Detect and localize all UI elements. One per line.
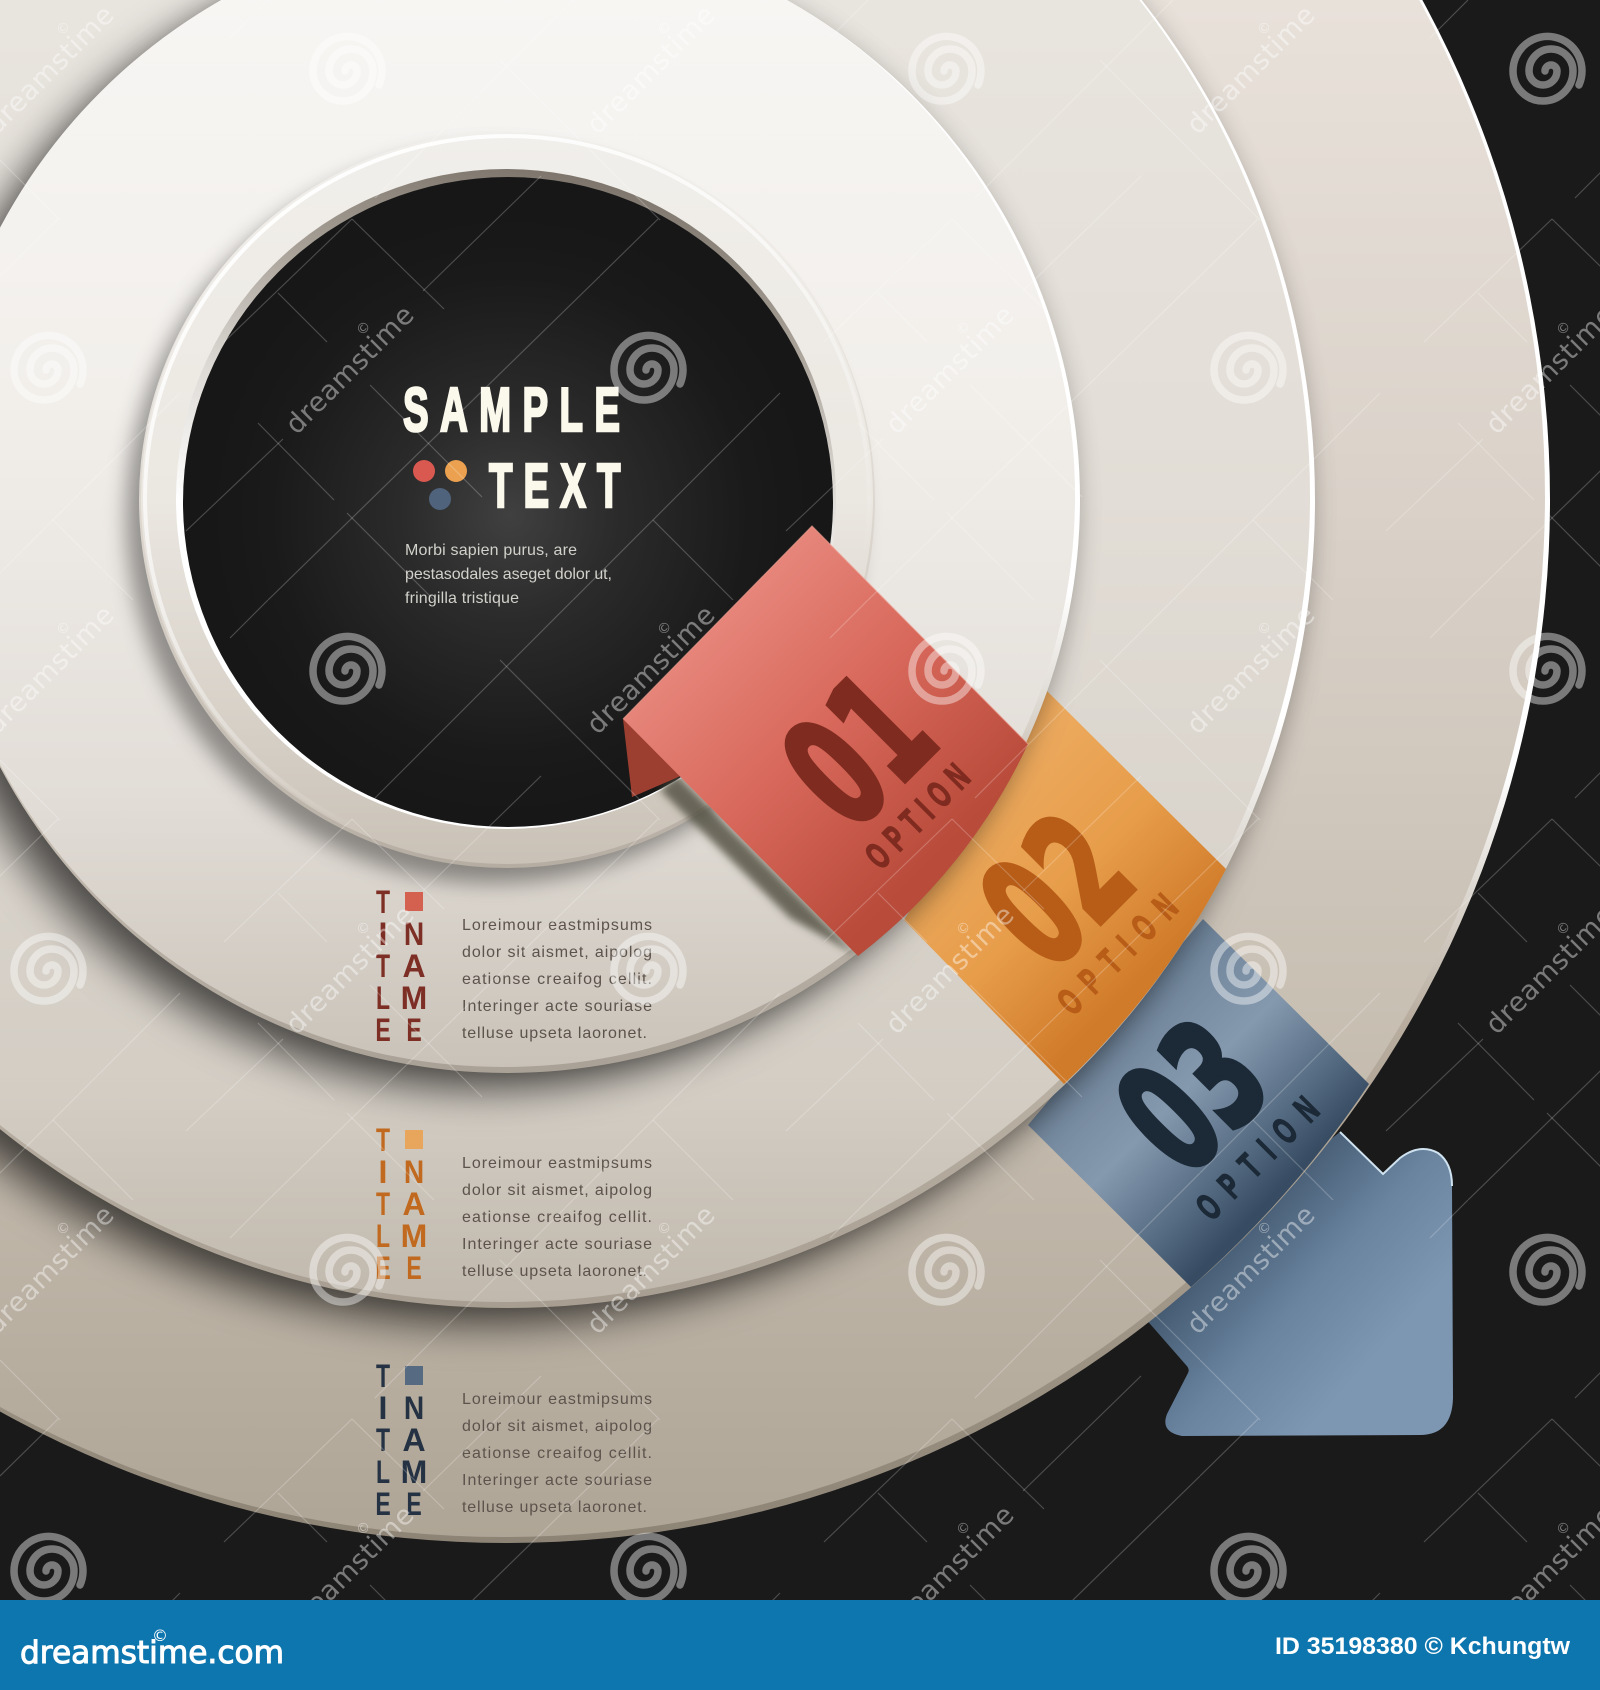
text block: intro: pestasodales aseget dolor ut, — [405, 566, 612, 583]
vertical label 2: I — [379, 1154, 387, 1190]
number: 02 OPTION: OPTION — [1050, 887, 1186, 1023]
vertical label 1: T — [376, 884, 390, 920]
vertical label 1: A — [402, 948, 426, 984]
heading: SAMPLE TEXT — [403, 375, 620, 520]
watermark: rotated wordmarks: © — [654, 18, 675, 39]
paragraph 1 — [462, 917, 652, 1042]
vertical label 1 — [375, 884, 427, 1048]
paragraph 3: eationse creaifog cellit. — [462, 1445, 652, 1462]
watermark: rotated wordmarks: © — [1254, 1218, 1275, 1239]
vertical label 2: M — [401, 1218, 427, 1254]
number: 01 OPTION: OPTION — [857, 756, 978, 877]
watermark: rotated wordmarks: © — [53, 618, 74, 639]
vertical label 1: N — [404, 917, 424, 952]
watermark: rotated wordmarks: © — [1553, 318, 1574, 339]
paragraph 1: Loreimour eastmipsums — [462, 917, 652, 934]
text block: intro: fringilla tristique — [405, 590, 519, 607]
watermark: rotated wordmarks: © — [953, 1518, 974, 1539]
vertical label 3: N — [404, 1391, 424, 1426]
heading: SAMPLE TEXT: SAMPLE — [403, 375, 620, 444]
paragraph 1: eationse creaifog cellit. — [462, 971, 652, 988]
vertical label 3: L — [376, 1454, 390, 1490]
watermark: rotated wordmarks: © — [353, 918, 374, 939]
watermark: rotated wordmarks: © — [353, 318, 374, 339]
shadow of central bezel — [126, 149, 860, 883]
vertical label 1: L — [376, 980, 390, 1016]
vertical label 1: T — [376, 948, 390, 984]
vertical label 3: A — [402, 1422, 426, 1458]
watermark: rotated wordmarks: © — [53, 1218, 74, 1239]
watermark: rotated wordmarks: © — [1254, 18, 1275, 39]
footer logo text: dreamstime.com — [20, 1635, 284, 1671]
vertical label 1: E — [406, 1012, 422, 1048]
shadow of ring 1 — [0, 0, 1082, 1091]
vertical label 2: T — [376, 1122, 390, 1158]
watermark: rotated wordmarks: dreamstime — [280, 300, 420, 440]
watermark: rotated wordmarks: dreamstime — [880, 300, 1020, 440]
paragraph 3: dolor sit aismet, aipolog — [462, 1418, 652, 1435]
number: 03 OPTION: OPTION — [1188, 1089, 1327, 1228]
number: 02 OPTION: 02 — [948, 782, 1166, 1000]
vertical label 2: E — [406, 1250, 422, 1286]
panel: middle ring 2 — [0, 0, 1315, 1308]
vertical label 2: L — [376, 1218, 390, 1254]
panel: inner ring 1 — [0, 0, 1080, 1073]
icon: three coloured dots — [413, 460, 467, 510]
watermark: rotated wordmarks: dreamstime — [280, 900, 420, 1040]
watermark: rotated wordmarks: dreamstime — [880, 1500, 1020, 1640]
watermark: rotated wordmarks: dreamstime — [581, 600, 721, 740]
watermark: rotated wordmarks: © — [353, 1518, 374, 1539]
paragraph 3: Loreimour eastmipsums — [462, 1391, 652, 1408]
paragraph 1: telluse upseta laoronet. — [462, 1025, 647, 1042]
text group: title name 3 — [375, 1358, 652, 1522]
paragraph 1: dolor sit aismet, aipolog — [462, 944, 652, 961]
ribbon: option 01 with fold — [623, 526, 1028, 956]
paragraph 2: eationse creaifog cellit. — [462, 1209, 652, 1226]
vertical label 3: M — [401, 1454, 427, 1490]
paragraph 2: dolor sit aismet, aipolog — [462, 1182, 652, 1199]
text group: title name 1 — [375, 884, 652, 1048]
vertical label 3: E — [375, 1486, 391, 1522]
vertical label 3: T — [376, 1358, 390, 1394]
vertical label 3: I — [379, 1390, 387, 1426]
watermark: rotated wordmarks: dreamstime — [1181, 1200, 1321, 1340]
vertical label 1: I — [379, 916, 387, 952]
vertical label 3: T — [376, 1422, 390, 1458]
vertical label 2: N — [404, 1155, 424, 1190]
vertical label 1: M — [401, 980, 427, 1016]
number: 01 OPTION: 01 — [750, 642, 968, 860]
text block: intro: Morbi sapien purus, are — [405, 542, 577, 559]
vertical label 2 — [375, 1122, 427, 1286]
watermark: rotated wordmarks: dreamstime — [581, 1200, 721, 1340]
footer banner — [0, 1600, 1600, 1690]
watermark: rotated wordmarks: © — [1254, 618, 1275, 639]
footer logo text: © — [152, 1626, 168, 1645]
watermark: rotated wordmarks: © — [953, 918, 974, 939]
number: 03 OPTION: 03 — [1084, 988, 1302, 1206]
paragraph 2: Loreimour eastmipsums — [462, 1155, 652, 1172]
paragraph 2: Interinger acte souriase — [462, 1236, 652, 1253]
paragraph 2: telluse upseta laoronet. — [462, 1263, 647, 1280]
watermark: rotated wordmarks: © — [654, 618, 675, 639]
watermark: rotated wordmarks: © — [53, 18, 74, 39]
vertical label 2: T — [376, 1186, 390, 1222]
ribbon: option 03 — [1028, 919, 1369, 1287]
vertical label 3 — [375, 1358, 427, 1522]
watermark: rotated wordmarks: © — [1553, 918, 1574, 939]
watermark: rotated wordmarks: © — [654, 1218, 675, 1239]
watermark: rotated wordmarks: © — [1553, 1518, 1574, 1539]
paragraph 3: Interinger acte souriase — [462, 1472, 652, 1489]
ribbon: option 02 — [904, 691, 1226, 1084]
vertical label 2: A — [402, 1186, 426, 1222]
watermark: rotated wordmarks: dreamstime — [280, 1500, 420, 1640]
text group: title name 2 — [375, 1122, 652, 1286]
watermark: rotated wordmarks: dreamstime — [1181, 0, 1321, 140]
watermark: rotated wordmarks: dreamstime — [581, 0, 721, 140]
shadow of ring 2 — [0, 0, 1317, 1326]
vertical label 3: E — [406, 1486, 422, 1522]
watermark: rotated wordmarks: dreamstime — [1181, 600, 1321, 740]
panel: central bezel with dark disc — [139, 132, 875, 868]
heading: SAMPLE TEXT: TEXT — [489, 451, 620, 520]
watermark: rotated wordmarks: © — [953, 318, 974, 339]
vertical label 1: E — [375, 1012, 391, 1048]
shadow beside red ribbon — [660, 775, 858, 956]
footer credit: ID 35198380 © Kchungtw — [1275, 1633, 1570, 1660]
paragraph 2 — [462, 1155, 652, 1280]
paragraph 3 — [462, 1391, 652, 1516]
watermark: rotated wordmarks: dreamstime — [880, 900, 1020, 1040]
text block: intro — [405, 542, 612, 607]
paragraph 1: Interinger acte souriase — [462, 998, 652, 1015]
paragraph 3: telluse upseta laoronet. — [462, 1499, 647, 1516]
icon: blue arrow tip — [1100, 1132, 1453, 1436]
vertical label 2: E — [375, 1250, 391, 1286]
